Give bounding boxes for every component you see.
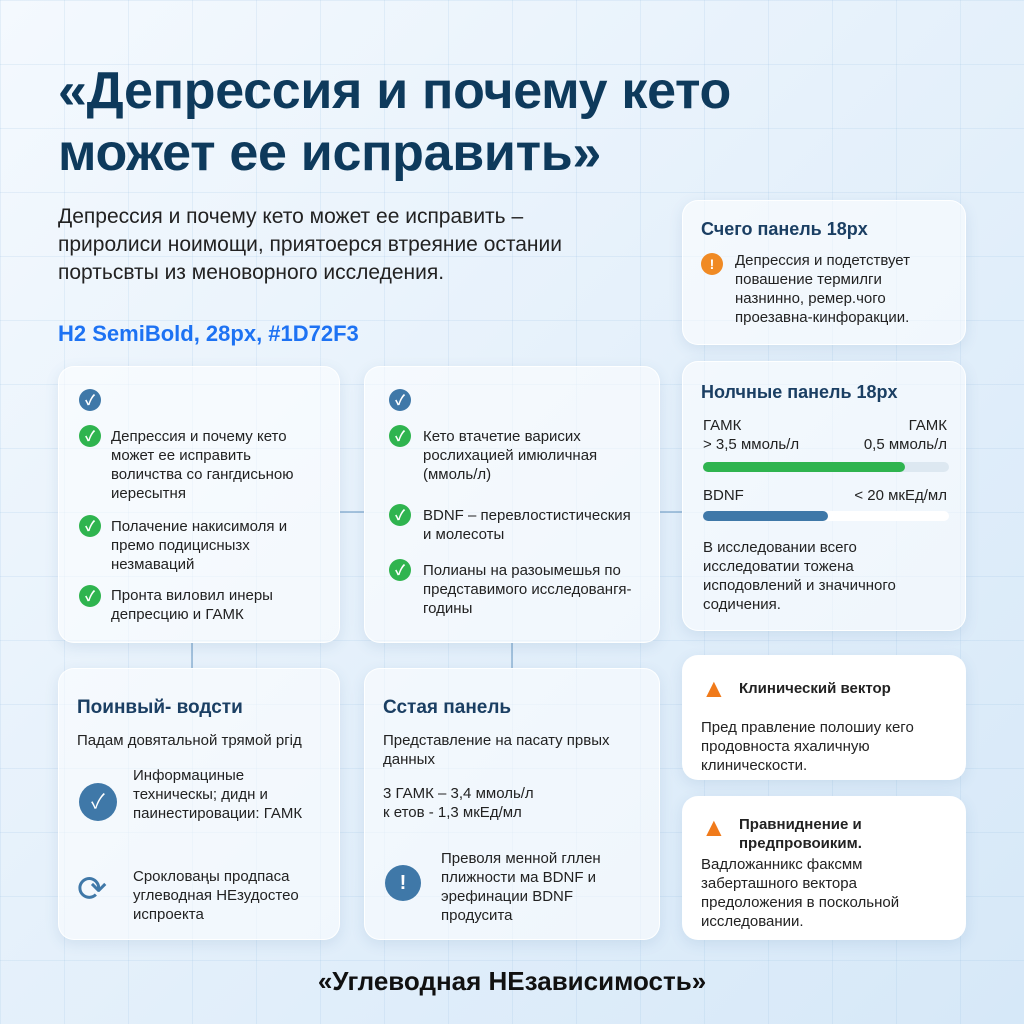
panel: bottom left bbox=[58, 668, 340, 940]
panel: middle checklist: Полианы на разоымешья по представимого исследовангя-годины bbox=[423, 562, 632, 617]
panel: left checklist: ✓ bbox=[85, 428, 95, 444]
panel: bottom middle: Сстая панель bbox=[383, 697, 511, 718]
panel: right chart: BDNF bbox=[703, 487, 744, 504]
bar: BDNF bbox=[703, 511, 949, 521]
panel: left checklist: ✓ bbox=[85, 392, 95, 408]
panel: warning 1 bbox=[682, 655, 966, 780]
subtitle: Депрессия и почему кето может ее исправить – приролиси ноимощи, приятоерся втреяние остании портьсвты из меноворного исследения. bbox=[58, 205, 562, 284]
panel: warning 2: Вадложанникс факсмм заберташного вектора предоложения в поскольной исследовании. bbox=[701, 856, 899, 930]
icon: exclamation: ! bbox=[400, 872, 406, 894]
panel: warning 2: Правниднение и предпровоиким. bbox=[739, 816, 862, 852]
panel: bottom middle: Представление на пасату првых данных bbox=[383, 732, 610, 768]
panel: left checklist: Пронта виловил инеры депресцию и ГАМК bbox=[111, 587, 273, 623]
panel: bottom left: Падам довятальной трямой ргід bbox=[77, 732, 302, 749]
panel: middle checklist: ✓ bbox=[395, 562, 405, 578]
panel: bottom middle bbox=[364, 668, 660, 940]
panel: bottom middle: Преволя менной гллен плижности ма BDNF и эрефинации BDNF продусита bbox=[441, 850, 601, 924]
panel: bottom left: Срокловаңы продпаса углеводная НЕзудостео испроекта bbox=[133, 868, 299, 923]
panel: warning 1: ▲ bbox=[701, 673, 727, 703]
panel: right top bbox=[682, 200, 966, 345]
panel: bottom left: Информациные техническы; дидн и паинестировации: ГАМК bbox=[133, 767, 302, 822]
panel: right top: Счего панель 18px bbox=[701, 219, 868, 239]
h2 heading: H2 SemiBold, 28px, #1D72F3 bbox=[58, 321, 359, 346]
panel: warning 1: Пред правление полошиу кего продовноста яхаличную клиническости. bbox=[701, 719, 914, 774]
panel: right chart: Нолчные панель 18px bbox=[701, 382, 898, 402]
panel: middle checklist: ✓ bbox=[395, 507, 405, 523]
panel: right chart: 0,5 ммоль/л bbox=[864, 436, 947, 453]
panel: right chart: ГАМК bbox=[703, 417, 741, 434]
panel: left checklist bbox=[58, 366, 340, 643]
panel: right chart: В исследовании всего исследоватии тожена исподовлений и значичного содичения. bbox=[703, 539, 896, 613]
panel: right chart: < 20 мкЕд/мл bbox=[854, 487, 947, 504]
icon: check circle bbox=[79, 783, 117, 821]
bar: GABA bbox=[703, 462, 949, 472]
panel: middle checklist bbox=[364, 366, 660, 643]
panel: warning 1: Клинический вектор bbox=[739, 680, 891, 697]
panel: right chart: > 3,5 ммоль/л bbox=[703, 436, 799, 453]
panel: right chart bbox=[682, 361, 966, 631]
panel: bottom middle: к етов - 1,3 мкЕд/мл bbox=[383, 804, 522, 821]
title: «Депрессия и почему кето может ее исправить» bbox=[58, 62, 731, 182]
panel: left checklist: ✓ bbox=[85, 518, 95, 534]
panel: middle checklist: Кето втачетие варисих рослихацией имюличная (ммоль/л) bbox=[423, 428, 597, 483]
panel: right chart: ГАМК bbox=[909, 417, 947, 434]
panel: bottom left: Поинвый- водсти bbox=[77, 697, 243, 718]
footer: «Углеводная НЕзависимость» bbox=[318, 966, 706, 996]
panel: middle checklist: BDNF – перевлостистическия и молесоты bbox=[423, 507, 631, 543]
panel: warning 2: ▲ bbox=[701, 812, 727, 842]
panel: right top: Депрессия и подетствует повашение термилги назнинно, ремер.чого проезавна-кинфоракции. bbox=[735, 252, 910, 326]
panel: warning 2 bbox=[682, 796, 966, 940]
panel: middle checklist: ✓ bbox=[395, 392, 405, 408]
panel: middle checklist: ✓ bbox=[395, 428, 405, 444]
panel: right top: ! bbox=[710, 256, 714, 272]
panel: left checklist: Полачение накисимоля и премо подициснызх незмаваций bbox=[111, 518, 287, 573]
icon: exclamation bbox=[385, 865, 421, 901]
icon: check circle: ✓ bbox=[91, 791, 105, 813]
panel: left checklist: Депрессия и почему кето может ее исправить воличства со гангдисьною иересытня bbox=[111, 428, 294, 502]
panel: left checklist: ✓ bbox=[85, 588, 95, 604]
icon: refresh: ⟳ bbox=[77, 868, 107, 909]
panel: bottom middle: 3 ГАМК – 3,4 ммоль/л bbox=[383, 785, 534, 802]
